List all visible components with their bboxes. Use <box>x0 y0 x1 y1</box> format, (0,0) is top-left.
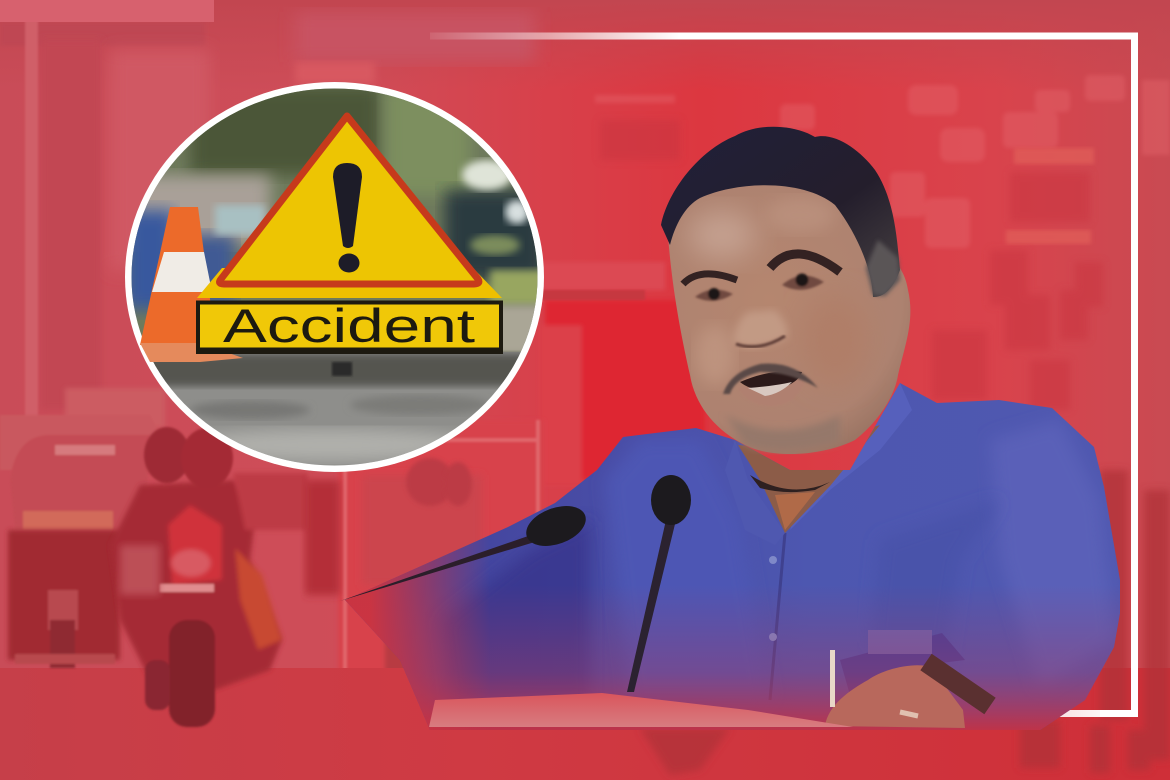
auto rickshaw <box>0 388 165 668</box>
motorbike with riders <box>110 427 340 727</box>
left building <box>0 0 535 420</box>
icon: warning triangle sign <box>197 116 502 298</box>
collar <box>790 383 912 530</box>
lower lip and mouth <box>738 378 806 406</box>
eyebrows <box>683 274 737 284</box>
hair <box>661 127 900 297</box>
shirt <box>330 380 1130 735</box>
cuff and pocket <box>840 633 965 695</box>
accident label plate <box>196 299 503 354</box>
people at far right <box>640 470 1170 775</box>
road <box>0 668 1170 780</box>
accident label plate: Accident <box>223 299 475 352</box>
icon: traffic cone <box>140 207 243 362</box>
podium <box>429 693 853 727</box>
white frame <box>430 32 1134 717</box>
deep red truck behind speaker <box>540 262 705 485</box>
middle truck <box>338 420 544 725</box>
portrait: speaker <box>330 127 1130 735</box>
photo backdrop <box>125 80 545 472</box>
nose <box>733 310 788 348</box>
ears and face <box>668 150 910 454</box>
neck skin <box>738 425 880 533</box>
icon: microphones <box>340 475 691 692</box>
head <box>661 127 910 454</box>
moustache <box>723 364 818 394</box>
traffic of cars in the distance <box>595 75 1170 248</box>
hand and watch <box>825 650 990 728</box>
circular accident photo <box>125 80 545 472</box>
eyes <box>695 274 824 301</box>
